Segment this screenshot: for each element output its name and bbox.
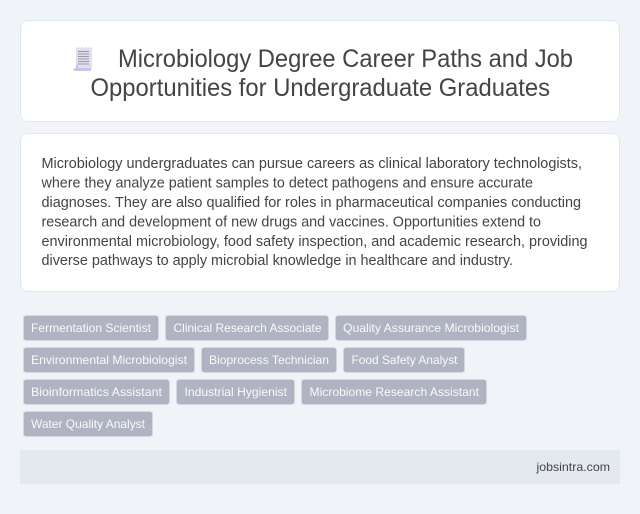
heading: title: Opportunities for Undergraduate Graduates — [90, 74, 550, 102]
footer text: source: jobsintra.com — [535, 460, 610, 474]
tag — [24, 348, 194, 372]
tag — [24, 380, 170, 404]
text block: description: Microbiology undergraduates can pursue careers as clinical laboratory technologists, — [42, 156, 582, 172]
tag — [24, 412, 152, 436]
tag — [344, 348, 464, 372]
tag: Clinical Research Associate — [174, 321, 322, 335]
footer bar — [20, 450, 620, 484]
text block: description: where they analyze patient samples to detect pathogens and ensure accurate — [41, 176, 533, 192]
icon: document scroll — [73, 47, 92, 71]
panel: description card — [20, 134, 620, 292]
tag: Bioinformatics Assistant — [31, 385, 163, 399]
tag — [176, 380, 294, 404]
tag — [302, 380, 486, 404]
tag: Water Quality Analyst — [31, 417, 146, 431]
tag: Microbiome Research Assistant — [310, 385, 480, 399]
text block: description: diagnoses. They are also qualified for roles in pharmaceutical companies conducting — [42, 195, 581, 211]
tag: Food Safety Analyst — [352, 353, 458, 367]
panel: title card — [20, 20, 620, 122]
tag — [336, 316, 526, 340]
tag: Bioprocess Technician — [209, 353, 329, 367]
tag — [24, 316, 158, 340]
tag: Environmental Microbiologist — [31, 353, 188, 367]
heading: title: Microbiology Degree Career Paths and Job — [118, 45, 573, 73]
text block: description: diverse pathways to apply microbial knowledge in healthcare and industry. — [42, 253, 513, 269]
tag — [166, 316, 328, 340]
tag: Quality Assurance Microbiologist — [343, 321, 520, 335]
tag list: job titles — [24, 316, 526, 436]
tag — [202, 348, 336, 372]
text block: description: research and development of new drugs and vaccines. Opportunities extend to — [42, 214, 541, 230]
text block: description — [41, 156, 588, 269]
tag: Fermentation Scientist — [31, 321, 152, 335]
heading: title — [90, 45, 573, 102]
text block: description: environmental microbiology, food safety inspection, and academic research, providing — [42, 234, 588, 250]
tag: Industrial Hygienist — [184, 385, 288, 399]
